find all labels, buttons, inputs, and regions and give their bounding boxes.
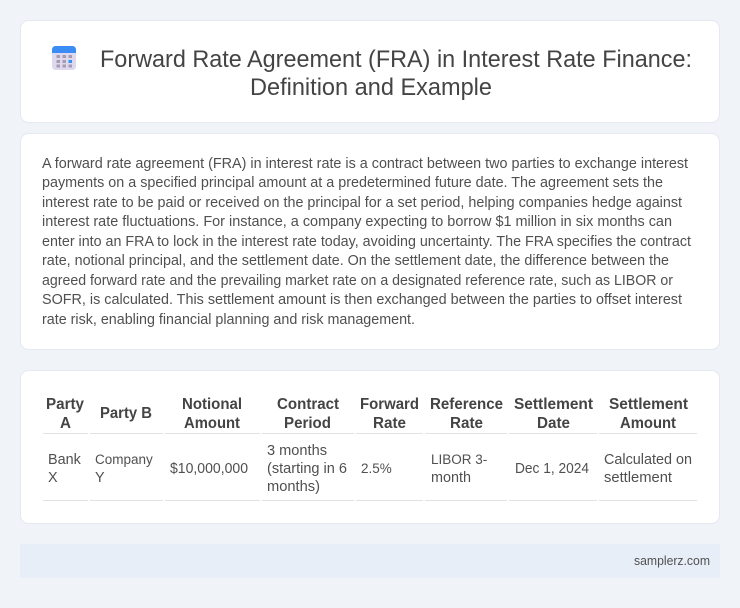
text block: FRA explanation: A forward rate agreement (FRA) in interest rate is a contract between two parties to exchange interest: [42, 156, 688, 172]
table header: Notional: [182, 396, 242, 413]
table header: Reference: [430, 396, 503, 413]
table header: Party B: [100, 405, 152, 422]
panel: title card: [20, 20, 720, 122]
title: [100, 46, 692, 101]
table row: 3 months: [267, 443, 327, 459]
table row: settlement: [604, 470, 672, 486]
table row: Company: [95, 452, 153, 467]
table header: Period: [284, 415, 331, 432]
text block: FRA explanation: enter into an FRA to lock in the interest rate today, avoiding uncertainty. The FRA specifies the contract: [42, 234, 691, 250]
text block: FRA explanation: payments on a specified principal amount at a predetermined future date. The agreement sets the: [42, 175, 663, 191]
text block: FRA explanation: SOFR, is calculated. This settlement amount is then exchanged between the parties to offset interest: [42, 292, 682, 308]
table header: Amount: [620, 415, 677, 432]
panel: FRA terms table: [20, 370, 720, 524]
text block: FRA explanation: interest rate to be paid or received on the principal for a set period, helping companies hedge against: [42, 195, 682, 211]
text block: FRA explanation: rate risk, enabling financial planning and risk management.: [42, 312, 415, 328]
text block: FRA explanation: interest rate fluctuations. For instance, a company expecting to borrow $1 million in six months can: [42, 214, 672, 230]
title: Definition and Example: [250, 74, 492, 101]
table header: Rate: [373, 415, 406, 432]
table header: Contract: [277, 396, 340, 413]
text block: FRA explanation: agreed forward rate and the prevailing market rate on a designated reference rate, such as LIBOR or: [42, 273, 673, 289]
icon: calendar: [52, 46, 76, 70]
table header: Date: [537, 415, 570, 432]
table header: Rate: [450, 415, 483, 432]
text block: FRA explanation: [42, 156, 691, 328]
table row: LIBOR 3-: [431, 452, 487, 467]
table row: Bank: [48, 452, 82, 468]
table row: month: [431, 470, 471, 486]
table row: Y: [95, 470, 105, 486]
table header: Amount: [184, 415, 241, 432]
text block: FRA explanation: rate, notional principal, and the settlement date. On the settlement date, the difference between the: [42, 253, 669, 269]
panel: description: [20, 134, 720, 350]
table row: [48, 443, 692, 495]
table row: $10,000,000: [170, 461, 248, 477]
table row: Dec 1, 2024: [515, 461, 589, 477]
footer bar: [20, 544, 720, 578]
table header: A: [60, 415, 71, 432]
table row: 2.5%: [361, 461, 392, 476]
table header: Party: [46, 396, 84, 413]
table row: (starting in 6: [267, 461, 347, 477]
table row: X: [48, 470, 58, 486]
footer source text: samplerz.com: [634, 554, 710, 568]
title: Forward Rate Agreement (FRA) in Interest Rate Finance:: [100, 46, 692, 73]
table header: Forward: [360, 396, 419, 413]
table header: [46, 396, 689, 432]
table header: Settlement: [514, 396, 594, 413]
table row: Calculated on: [604, 452, 692, 468]
table row: months): [267, 479, 320, 495]
table header: Settlement: [609, 396, 689, 413]
